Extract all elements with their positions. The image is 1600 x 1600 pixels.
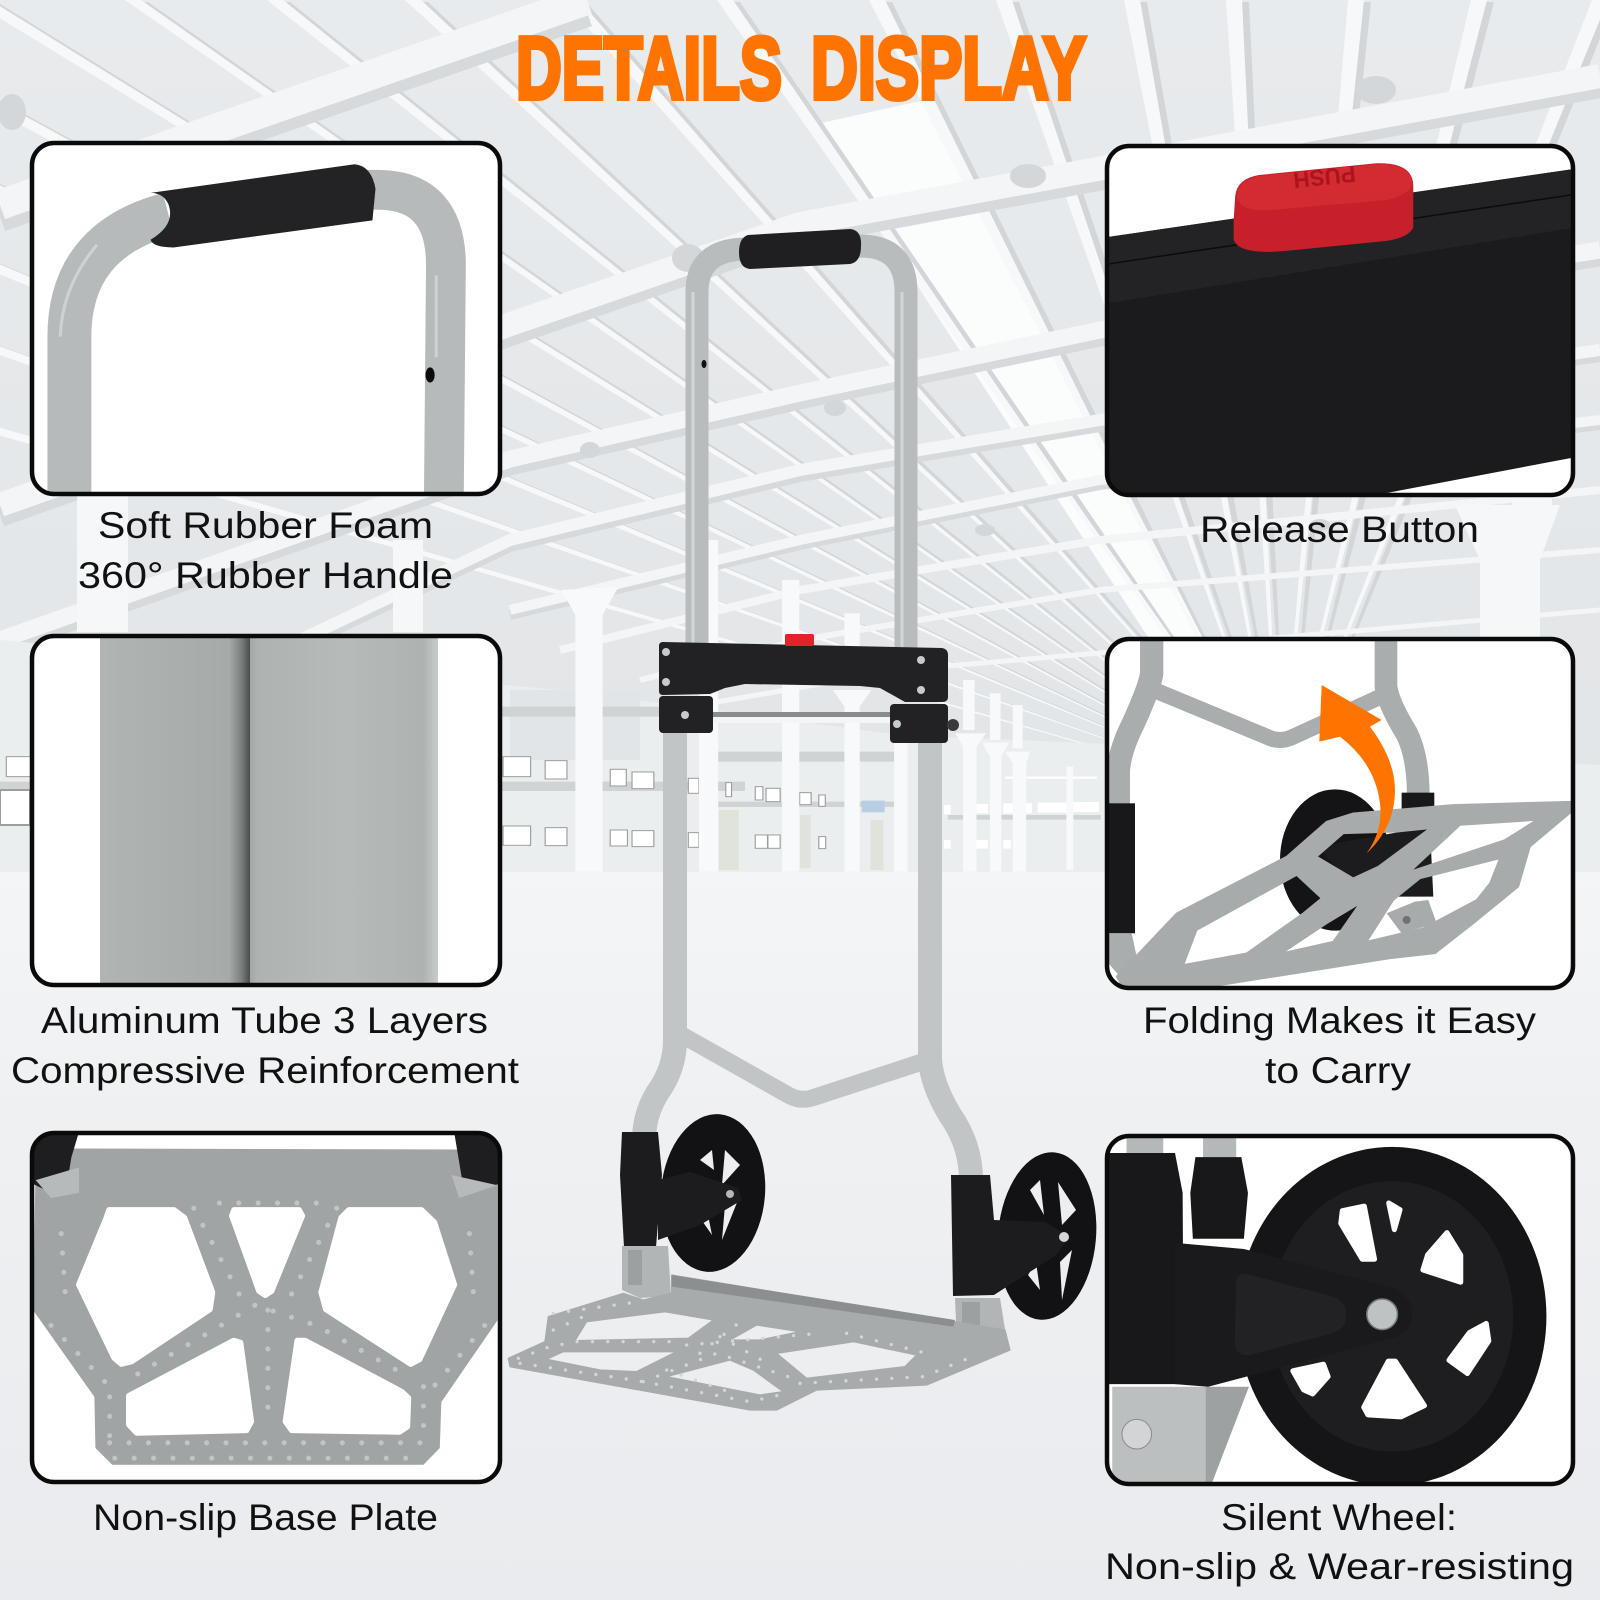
right tube	[250, 630, 438, 990]
push text: PUSH	[1292, 161, 1357, 193]
top view plate	[33, 1148, 497, 1465]
black clamps	[1106, 1153, 1248, 1384]
red release button	[785, 634, 814, 646]
label: base plate: Non-slip Base Plate	[93, 1497, 438, 1538]
right wheel assembly	[951, 1148, 1103, 1352]
silver foot	[1112, 1387, 1206, 1486]
label: rubber handle	[78, 505, 453, 596]
black clamps	[1107, 793, 1434, 933]
panel: rubber handle	[32, 143, 500, 495]
trolley chrome rod	[712, 712, 892, 723]
label: aluminum tube	[11, 1000, 520, 1091]
trolley upper handle frame	[693, 246, 906, 655]
panel: release button	[1106, 146, 1578, 503]
label: silent wheel: Silent Wheel:	[1221, 1497, 1457, 1538]
wheel arm	[1175, 1244, 1250, 1387]
black frame bar	[1106, 168, 1578, 503]
label: folding	[1143, 1000, 1537, 1091]
label: folding: to Carry	[1265, 1050, 1412, 1091]
folded frame tubes	[1118, 637, 1418, 807]
trolley base plate	[508, 1275, 1010, 1410]
upper tubes	[1126, 1138, 1236, 1158]
panel: aluminum tube	[32, 630, 500, 990]
panel: folding	[1107, 637, 1573, 988]
wheel windows	[1293, 1203, 1489, 1417]
label: folding: Folding Makes it Easy	[1143, 1000, 1537, 1041]
trolley black bracket	[659, 642, 959, 743]
red push button	[1234, 163, 1413, 252]
label: silent wheel	[1105, 1497, 1574, 1587]
button top face	[1237, 164, 1412, 210]
left tube	[100, 630, 250, 990]
left wheel assembly	[620, 1110, 772, 1298]
label: silent wheel: Non-slip & Wear-resisting	[1105, 1546, 1574, 1587]
handle tube	[60, 190, 446, 495]
small bracket	[1387, 900, 1437, 933]
title: DETAILS	[516, 18, 782, 118]
black wheel	[1237, 1147, 1546, 1486]
corner wheels	[34, 1135, 78, 1189]
orange fold arrow	[1319, 685, 1395, 853]
rubber foam grip	[151, 164, 376, 247]
folded base plate	[1117, 802, 1572, 988]
panel: base plate	[31, 1132, 503, 1482]
panel: silent wheel	[1106, 1134, 1573, 1486]
plate cut-outs	[79, 1210, 454, 1433]
title: DISPLAY	[811, 18, 1086, 118]
central product: hand trolley	[508, 229, 1103, 1410]
axle bolt	[1367, 1299, 1397, 1330]
wheel behind plate	[1280, 789, 1390, 931]
title	[516, 18, 1086, 118]
label: rubber handle: 360° Rubber Handle	[78, 555, 453, 596]
trolley lower frame	[644, 730, 971, 1180]
label: rubber handle: Soft Rubber Foam	[98, 505, 433, 546]
label: release button: Release Button	[1200, 509, 1479, 550]
trolley foam grip	[739, 229, 861, 269]
label: aluminum tube: Compressive Reinforcement	[11, 1050, 520, 1091]
label: aluminum tube: Aluminum Tube 3 Layers	[41, 1000, 488, 1041]
